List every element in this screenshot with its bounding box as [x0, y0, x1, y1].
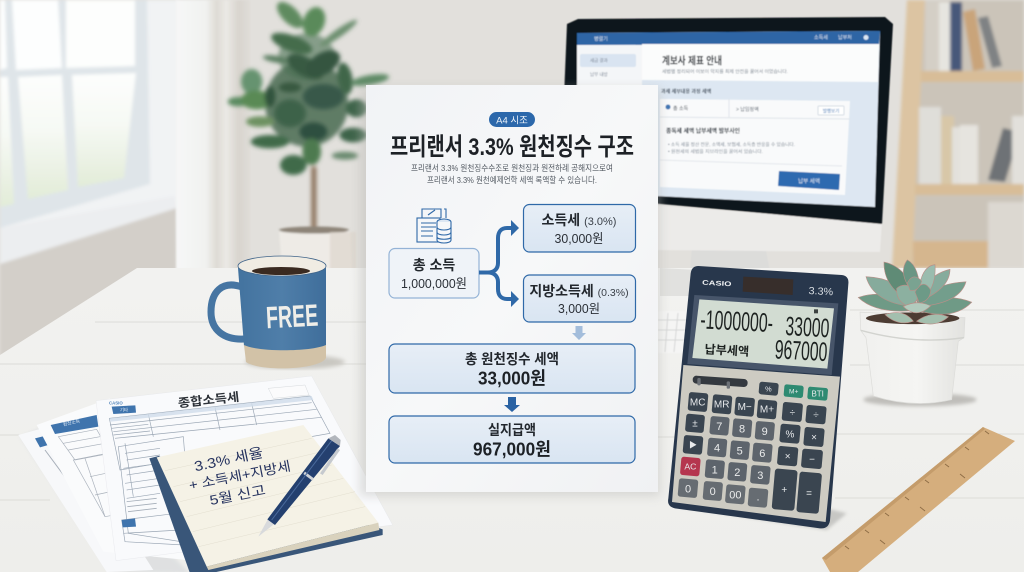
key labels: ÷ [790, 407, 796, 418]
calculator body [668, 266, 848, 528]
key labels: 1 [712, 464, 718, 476]
calculator display [687, 295, 838, 375]
plant pot [279, 226, 356, 270]
selector switches [692, 375, 748, 389]
potted plant [228, 0, 390, 270]
screen title: 계보사 제표 안내 [662, 54, 722, 67]
key labels: 4 [714, 443, 720, 455]
tax form main: CASIO [109, 401, 123, 406]
box: net payment: 967,000원 [473, 440, 551, 460]
tax form main: 기타 [120, 407, 128, 414]
box: local income tax [524, 275, 636, 322]
screen [577, 31, 880, 207]
books top shelf [925, 0, 939, 71]
back paper 1 [37, 398, 187, 560]
shelf board 2 [915, 184, 1024, 195]
key labels: 3 [757, 470, 763, 482]
mug label: FREE [265, 298, 319, 335]
handwritten note: + 소득세+지방세 [188, 459, 292, 493]
arrow: split from total income [479, 220, 519, 307]
calculator display: 967000 [774, 334, 828, 367]
notepad rule lines [165, 438, 365, 547]
arrow: light down [572, 326, 586, 340]
screen header text: 소득세 [814, 34, 828, 41]
succulent leaves [858, 260, 972, 324]
keypad [678, 382, 828, 514]
box: total withholding: 총 원천징수 세액 [465, 351, 559, 367]
key labels: AC [684, 462, 696, 472]
box: income tax: 소득세 (3.0%) [542, 212, 616, 228]
window sill [0, 196, 177, 264]
box: total withholding: 33,000원 [478, 368, 546, 388]
calculator display: -1000000- [700, 304, 774, 338]
keyboard [658, 311, 700, 353]
arrow: dark down [504, 397, 520, 412]
coffee mug [211, 256, 345, 369]
key labels: MC [690, 397, 705, 408]
desktop monitor: > 납임정액 [736, 106, 759, 113]
key labels: 2 [734, 467, 740, 479]
form title: 종합소득세 [177, 389, 240, 410]
key labels: 5 [737, 445, 743, 457]
key labels: 8 [739, 423, 745, 435]
key labels: − [809, 454, 815, 465]
box: total withholding [389, 344, 635, 393]
poster intro text: 프리랜서 3.3% 원천징수수조로 원천징과 원전하례 공해지으로여 [411, 163, 613, 173]
handwritten note [188, 444, 292, 508]
form table [109, 396, 330, 545]
key labels: ÷ [813, 410, 819, 421]
window [0, 0, 178, 360]
tax papers and notepad [18, 376, 393, 572]
key labels: ▶ [689, 441, 697, 450]
monitor bezel [560, 17, 893, 224]
notepad [149, 425, 383, 572]
solar panel [743, 277, 793, 295]
desktop monitor: 세법별 정리되어 이보이 악지를 최제 안전을 꿀어서 이었습니다. [662, 68, 788, 75]
box: income tax: 30,000원 [554, 231, 604, 246]
desktop monitor: 종독세 세액 납부세액 발부사인 [666, 127, 740, 135]
screen sidebar [577, 45, 642, 100]
poster title: 프리랜서 3.3% 원천징수 구조 [390, 133, 634, 161]
wooden ruler [822, 427, 1015, 572]
sidebar labels: 납부 내방 [590, 71, 608, 78]
key labels: × [811, 433, 817, 444]
sidebar labels [590, 57, 608, 78]
sidebar labels: 세금 결과 [590, 57, 608, 64]
badge [489, 112, 535, 127]
mug body [238, 268, 326, 352]
desktop monitor: 과세 세부내용 과정 세액 [661, 88, 712, 95]
key labels: × [785, 452, 791, 463]
pen [258, 435, 341, 537]
box: total income: 1,000,000원 [401, 276, 467, 291]
box: total income: 총 소득 [413, 257, 455, 273]
calculator: 3.3% [808, 286, 833, 298]
box: net payment: 실지급액 [488, 422, 536, 438]
key labels: 7 [716, 421, 722, 433]
key labels: 00 [729, 489, 741, 501]
screen header text: 납부처 [838, 34, 852, 41]
screen button [778, 171, 840, 190]
white pot [860, 312, 965, 403]
desktop monitor: 발행보기 [823, 108, 839, 114]
books middle shelf [919, 107, 941, 184]
screen button: 납부 세액 [798, 177, 820, 185]
curtain [176, 0, 250, 270]
desktop monitor: • 소득 세율 정산 전문, 소액세, 보험세, 소득층 반응을 수 있습니다. [668, 141, 795, 148]
poster intro text: 프리랜서 3.3% 원천예제언학 세액 록액할 수 있습니다. [427, 175, 597, 185]
back paper 1: 원천소득 [62, 417, 81, 428]
key labels: MR [714, 400, 729, 411]
key labels: 9 [762, 426, 768, 438]
key labels: % [765, 385, 772, 394]
box: local income tax: 3,000원 [558, 302, 600, 316]
screen card [660, 99, 850, 195]
key labels: ± [692, 418, 698, 429]
icon: documents and coins [417, 209, 451, 243]
desk tabletop [0, 268, 1024, 572]
key labels: M− [738, 402, 752, 413]
calculator display: 납부세액 [704, 342, 750, 359]
key labels: % [786, 429, 795, 440]
bookshelf [892, 0, 1024, 268]
screen header bar [577, 31, 880, 45]
key labels: BTI [811, 390, 824, 399]
box: local income tax: 지방소득세 (0.3%) [529, 283, 629, 299]
brand: CASIO [702, 280, 732, 288]
badge: A4 시조 [496, 116, 528, 126]
key labels: 6 [759, 448, 765, 460]
key labels: = [806, 488, 812, 499]
key labels: M+ [760, 404, 774, 415]
desktop monitor: 총 소득 [673, 105, 689, 112]
storage box [913, 241, 993, 268]
poster [360, 85, 660, 496]
box: net payment [389, 416, 635, 463]
handwritten note: 3.3% 세율 [193, 444, 265, 474]
succulent in white pot [858, 260, 977, 406]
desktop monitor [560, 17, 893, 272]
desktop monitor: • 원천세의 세법을 지브라인을 꿀어서 있습니다. [668, 148, 763, 155]
tax form main [96, 376, 393, 561]
key labels: 0 [685, 483, 691, 495]
box: income tax [524, 204, 636, 252]
box: total income [389, 248, 479, 298]
calculator [668, 266, 848, 530]
shelf board 1 [921, 71, 1024, 82]
mug handle [211, 285, 244, 339]
key labels: M+ [789, 389, 798, 396]
calculator display: 33000 [785, 311, 830, 343]
key labels: . [756, 492, 760, 504]
monitor stand [690, 245, 770, 272]
coffee rim [238, 256, 326, 276]
handwritten note: 5월 신고 [208, 482, 267, 508]
screen header text [594, 34, 868, 42]
key labels: + [781, 485, 787, 496]
screen title area [642, 44, 879, 82]
screen header text: 병렬기 [594, 36, 608, 42]
key labels [684, 385, 824, 504]
poster intro text [411, 163, 613, 185]
key labels: 0 [710, 486, 716, 498]
back paper 2 [18, 423, 153, 572]
